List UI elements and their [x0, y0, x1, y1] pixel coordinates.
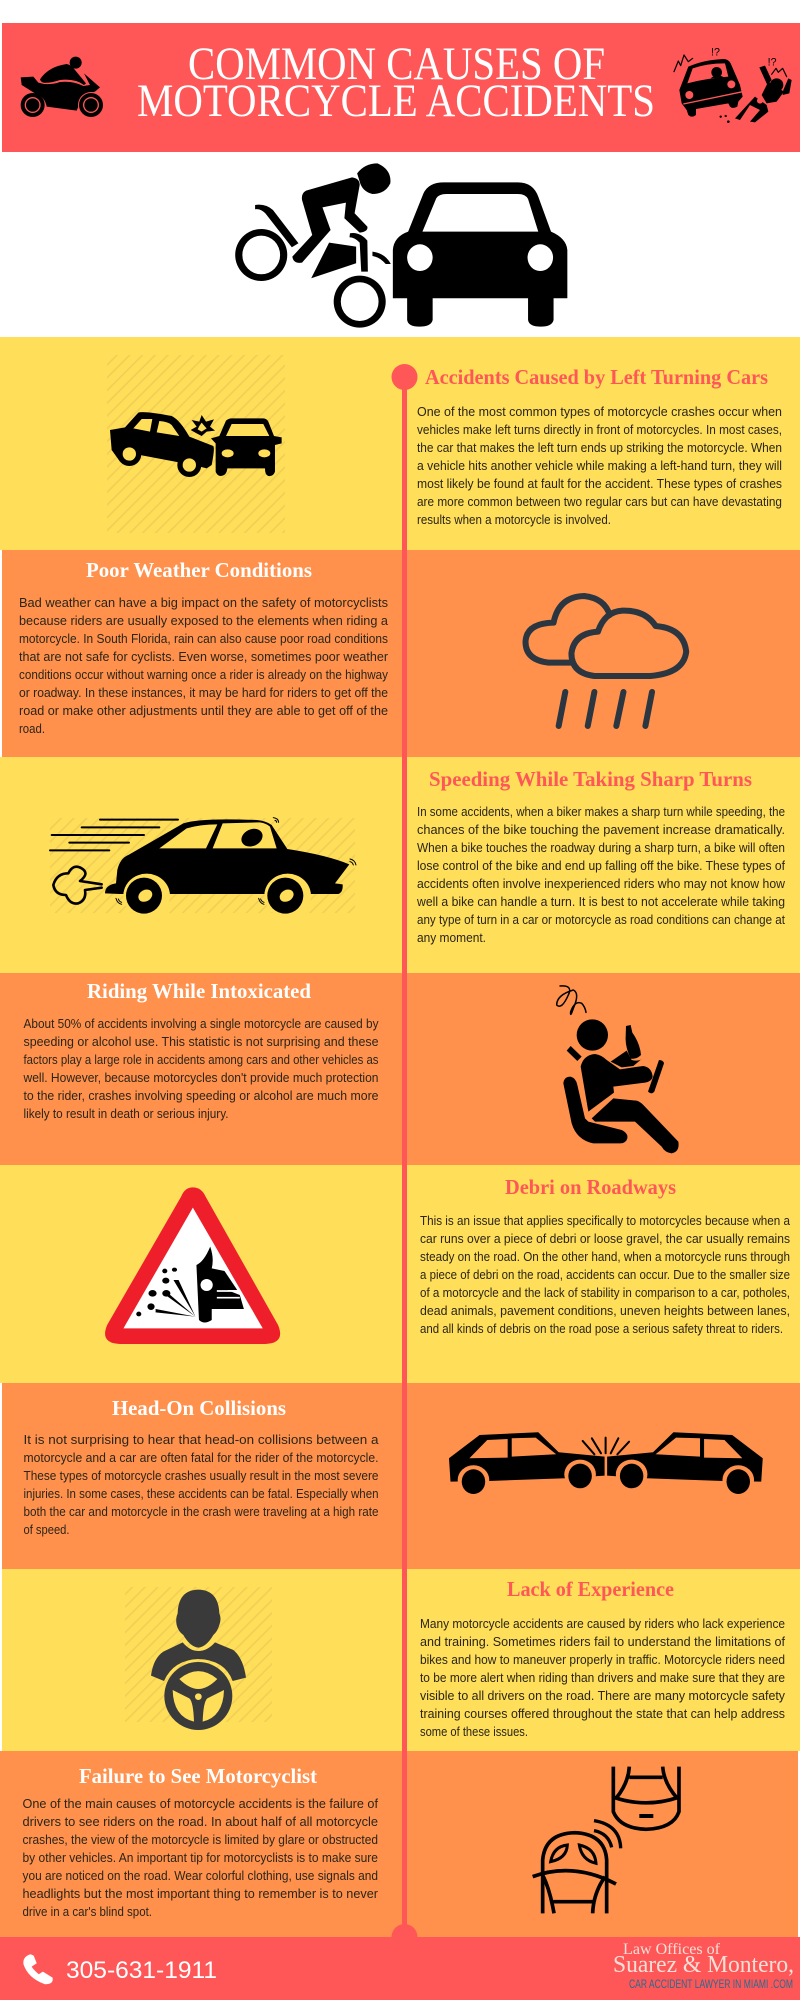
heading: Riding While Intoxicated: [87, 979, 311, 1003]
top timeline dot: [392, 364, 418, 390]
panel: debris on roadways: [0, 1165, 800, 1383]
text block: [417, 404, 782, 527]
icon: two cars crashing: [110, 412, 282, 477]
text block: These types of motorcycle crashes usually result in the most severe: [24, 1468, 378, 1483]
icon: car hitting motorcyclist: !?: [711, 47, 720, 59]
text block: likely to result in death or serious injury.: [24, 1106, 228, 1121]
footer banner: [0, 1937, 800, 2000]
text block: well. However, because motorcycles don't provide much protection: [23, 1070, 378, 1085]
panel: riding intoxicated: [0, 973, 800, 1165]
phone number: 305-631-1911: [66, 1957, 217, 1984]
icon: speeding car: [50, 818, 356, 918]
text block: [19, 595, 389, 736]
icon: cars in blind spot: [533, 1767, 679, 1913]
text block: crashes, the view of the motorcycle is limited by glare or obstructed: [22, 1832, 378, 1847]
heading: Accidents Caused by Left Turning Cars: [425, 365, 768, 389]
text block: [22, 1796, 379, 1919]
text block: road or make other adjustments until they are able to get off of the: [19, 703, 388, 718]
text block: a vehicle hits another vehicle while making a left-hand turn, they will: [417, 458, 782, 473]
icon: motorcycle: [21, 57, 104, 118]
text block: conditions occur without warning once a rider is already on the highway: [19, 667, 388, 682]
text block: [420, 1616, 785, 1739]
text block: motorcycle and a car are often fatal for the rider of the motorcycle.: [24, 1450, 378, 1465]
text block: that are not safe for cyclists. Even worse, sometimes poor weather: [19, 649, 389, 664]
text block: [23, 1016, 379, 1121]
text block: [416, 804, 786, 945]
text block: One of the main causes of motorcycle accidents is the failure of: [22, 1796, 378, 1811]
icon: car hitting motorcyclist: !?: [768, 57, 777, 69]
icon: phone: [23, 1954, 53, 1984]
text block: accidents often involve inexperienced riders who may not know how: [417, 876, 786, 891]
panel: speeding on turns: [0, 757, 800, 973]
icon: cyclist colliding with car: [235, 163, 567, 328]
icon: driver at steering wheel: [151, 1590, 246, 1730]
text block: headlights but the most important thing to remember is to never: [22, 1886, 379, 1901]
heading: Failure to See Motorcyclist: [79, 1764, 317, 1788]
text block: both the car and motorcycle in the crash were traveling at a high rate: [24, 1504, 378, 1519]
heading: Head-On Collisions: [112, 1396, 286, 1420]
heading: Speeding While Taking Sharp Turns: [429, 767, 752, 791]
text block: and training. Sometimes riders fail to understand the limitations of: [420, 1634, 785, 1649]
text block: About 50% of accidents involving a single motorcycle are caused by: [24, 1016, 379, 1031]
text block: road.: [19, 721, 45, 736]
icon: rain clouds: [526, 596, 686, 726]
text block: [24, 1432, 379, 1537]
text block: visible to all drivers on the road. There are many motorcycle safety: [420, 1688, 785, 1703]
text block: by other vehicles. An important tip for motorcyclists is to make sure: [22, 1850, 378, 1865]
text block: because riders are usually exposed to the elements when riding a: [19, 613, 389, 628]
law firm name: Suarez & Montero,: [613, 1952, 794, 1978]
title: COMMON CAUSES OF: [188, 38, 605, 90]
header banner: [2, 23, 800, 152]
text block: dead animals, pavement conditions, uneven heights between lanes,: [420, 1303, 790, 1318]
text block: It is not surprising to hear that head-on collisions between a: [24, 1432, 379, 1447]
text block: well a bike can handle a turn. It is best to not accelerate while taking: [416, 894, 785, 909]
text block: training courses offered throughout the state that can help address: [420, 1706, 785, 1721]
text block: Bad weather can have a big impact on the safety of motorcyclists: [19, 595, 388, 610]
bottom timeline dot: [392, 1924, 418, 1950]
text block: you are noticed on the road. Wear colorful clothing, use signals and: [22, 1868, 378, 1883]
timeline line: [392, 364, 418, 1950]
text block: any moment.: [417, 930, 486, 945]
title: MOTORCYCLE ACCIDENTS: [137, 75, 655, 127]
text block: to the rider, crashes involving speeding or alcohol are much more: [24, 1088, 378, 1103]
text block: some of these issues.: [420, 1724, 528, 1739]
text block: results when a motorcycle is involved.: [417, 512, 611, 527]
title: [137, 38, 655, 127]
panel: failure to see motorcyclist: [0, 1751, 798, 1937]
text block: or roadway. In these instances, it may be hard for riders to get off the: [19, 685, 388, 700]
heading: Debri on Roadways: [505, 1175, 676, 1199]
icon: head-on crash: [449, 1432, 763, 1495]
icon: intoxicated driver: [557, 986, 679, 1153]
icon: road debris warning sign: [105, 1187, 280, 1344]
heading: Lack of Experience: [507, 1577, 674, 1601]
text block: drive in a car's blind spot.: [22, 1904, 152, 1919]
text block: motorcycle. In South Florida, rain can also cause poor road conditions: [19, 631, 388, 646]
icon: car hitting motorcyclist: [674, 47, 792, 123]
heading: Poor Weather Conditions: [86, 558, 312, 582]
text block: One of the most common types of motorcycle crashes occur when: [417, 404, 782, 419]
panel: head-on collisions: [2, 1383, 800, 1569]
panel: lack of experience: [2, 1569, 800, 1751]
text block: drivers to see riders on the road. In about half of all motorcycle: [22, 1814, 378, 1829]
text block: chances of the bike touching the pavement increase dramatically.: [417, 822, 785, 837]
text block: injuries. In some cases, these accidents can be fatal. Especially when: [24, 1486, 378, 1501]
panel: poor weather: [2, 550, 800, 757]
text block: factors play a large role in accidents among cars and other vehicles as: [24, 1052, 379, 1067]
text block: speeding or alcohol use. This statistic is not surprising and these: [24, 1034, 378, 1049]
panel: left turning cars: [0, 337, 800, 550]
law firm name: Law Offices of: [623, 1941, 721, 1958]
text block: most likely be found at fault for the accident. These types of crashes: [417, 476, 782, 491]
law firm name: [613, 1941, 794, 1978]
text block: [420, 1213, 791, 1336]
text block: of speed.: [24, 1522, 70, 1537]
